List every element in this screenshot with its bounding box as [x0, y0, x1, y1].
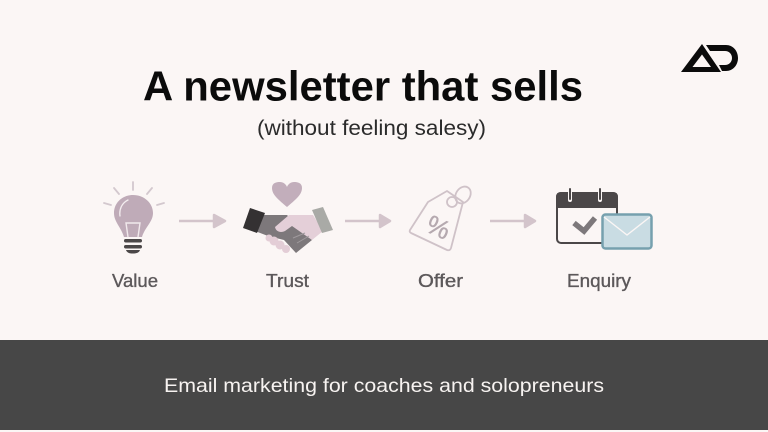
icon: handshake [243, 207, 333, 253]
label: Offer: Offer [418, 271, 463, 291]
process step: Trust [243, 182, 333, 291]
title: A newsletter that sells [143, 62, 583, 110]
icon: heart [272, 182, 302, 207]
process step: Offer [410, 184, 474, 291]
footer text: Email marketing for coaches and solopreneurs [164, 375, 604, 397]
arrow: trust to offer [345, 215, 390, 227]
process step: Value [104, 182, 164, 291]
arrow: value to trust [179, 215, 225, 227]
icon: light bulb [104, 182, 164, 254]
label: Trust: Trust [266, 271, 309, 291]
icon: AD logo [681, 44, 738, 72]
label: Value: Value [112, 271, 158, 291]
icon: price tag: % [422, 209, 455, 246]
arrow: offer to enquiry [490, 215, 535, 227]
label: Enquiry: Enquiry [567, 271, 631, 291]
footer band [0, 340, 768, 430]
icon: envelope [602, 214, 652, 248]
icon: calendar [556, 189, 618, 243]
process step: Enquiry [556, 189, 652, 291]
subtitle: (without feeling salesy) [257, 117, 486, 140]
